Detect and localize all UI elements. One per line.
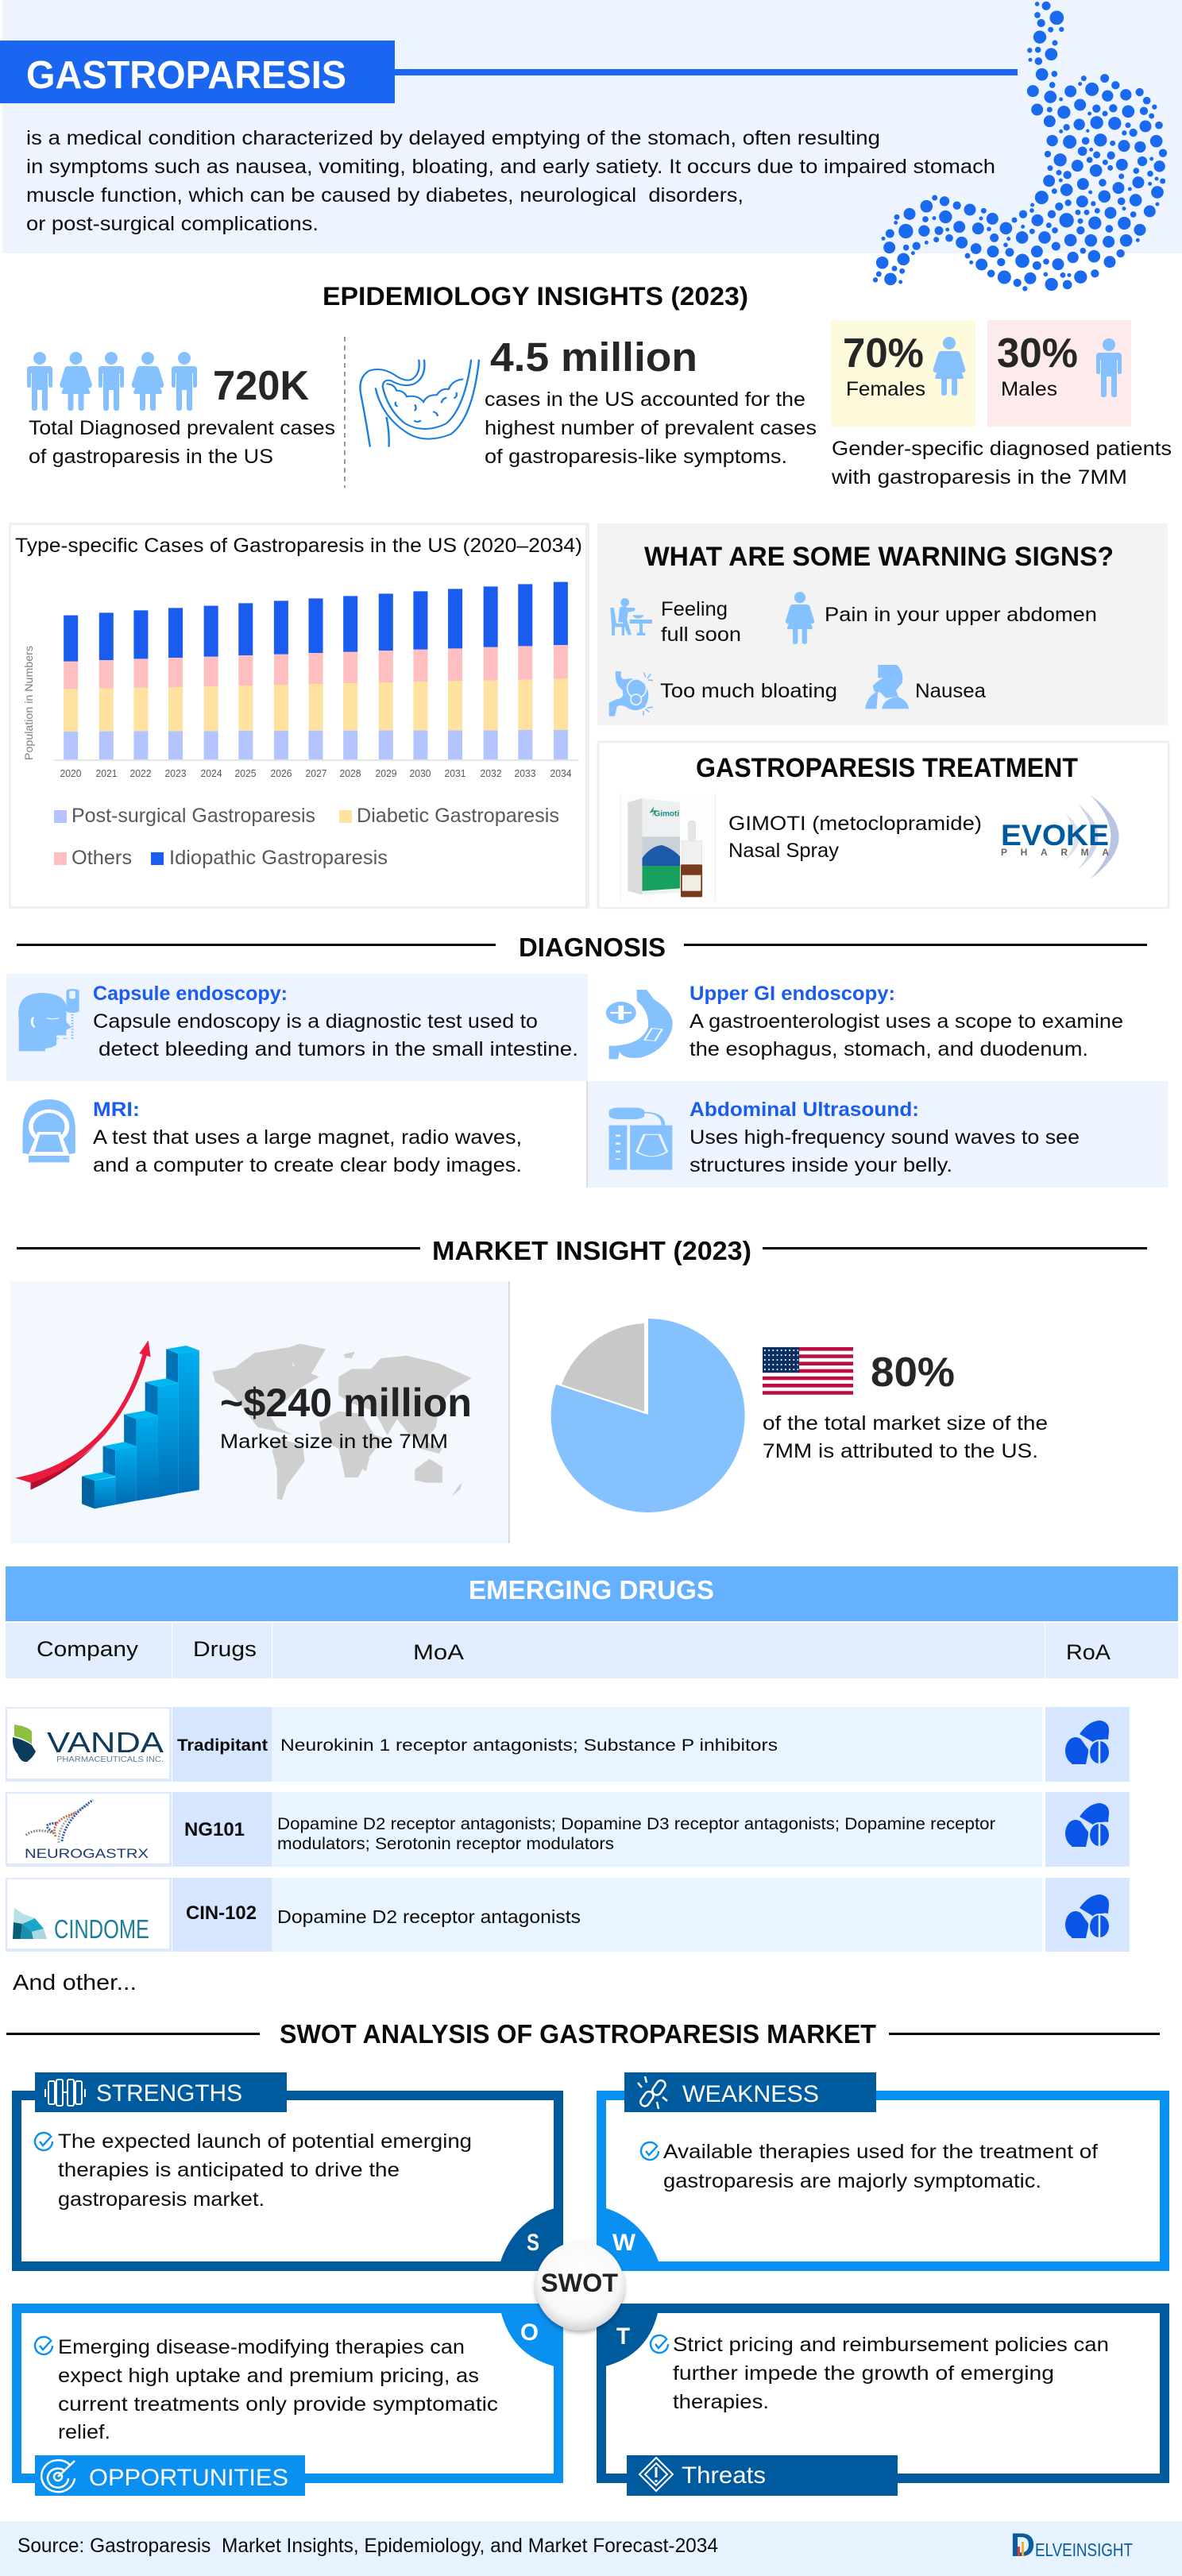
logo: Vanda: [13, 1724, 164, 1764]
pie chart: US share: [551, 1319, 745, 1512]
panel: opportunities: O: [520, 2319, 539, 2346]
panel: capsule endoscopy: detect bleeding and tumors in the small intestine.: [98, 1038, 578, 1060]
chart legend: Others: [71, 847, 132, 869]
icon: pills: [1065, 1721, 1110, 1764]
caption: gender split: [831, 438, 1172, 489]
panel: weakness: Available therapies used for the treatment of: [663, 2141, 1098, 2163]
panel: market size: ~$240 million: [220, 1381, 472, 1425]
chart title: Type-specific Cases of Gastroparesis in the US (2020–2034): [15, 535, 582, 557]
panel: upper GI endoscopy: Upper GI endoscopy:: [690, 983, 895, 1005]
row: Neurogastrx / NG101: [6, 1792, 1130, 1867]
row: Vanda / Tradipitant: [6, 1707, 1130, 1782]
treatment name: GIMOTI (metoclopramide): [728, 813, 982, 835]
x axis years: 2032: [480, 768, 502, 779]
row: Vanda / Tradipitant: Neurokinin 1 receptor antagonists; Substance P inhibitors: [280, 1736, 778, 1755]
warning: feeling full soon: full soon: [661, 624, 741, 646]
x axis years: 2030: [410, 768, 431, 779]
panel: weakness: [597, 2072, 1165, 2271]
panel: market size: [10, 1281, 509, 1543]
row: Cindome / CIN-102: CIN-102: [186, 1902, 257, 1924]
icon: MRI scanner: [22, 1099, 75, 1162]
intro text block: muscle function, which can be caused by diabetes, neurological disorders,: [26, 184, 744, 207]
panel: upper GI endoscopy: [606, 983, 1123, 1060]
panel: males share: 30%: [997, 330, 1078, 377]
x axis years: [60, 768, 572, 779]
world map: [212, 1344, 472, 1500]
chart legend: Diabetic Gastroparesis: [357, 805, 559, 827]
x axis years: 2024: [200, 768, 222, 779]
panel: males share: Males: [1001, 378, 1057, 400]
icon: dotted stomach: [873, 2, 1167, 291]
x axis years: 2034: [550, 768, 572, 779]
logo: Vanda: PHARMACEUTICALS INC.: [56, 1755, 164, 1764]
icon: US flag: [763, 1347, 853, 1395]
strengths header: STRENGTHS: [96, 2080, 242, 2107]
row: Neurogastrx / NG101: NG101: [184, 1819, 245, 1840]
panel: strengths: The expected launch of potential emerging: [58, 2130, 472, 2153]
x axis years: 2026: [270, 768, 292, 779]
stat: 720K diagnosed cases: of gastroparesis in the US: [29, 446, 273, 468]
panel: capsule endoscopy: [6, 974, 588, 1081]
treatment name: [728, 813, 982, 862]
stat: 720K diagnosed cases: [27, 352, 335, 468]
icon: woman: [933, 337, 965, 396]
stat: 80 percent: [763, 1350, 1048, 1462]
x axis years: 2022: [130, 768, 152, 779]
caption: gender split: with gastroparesis in the 7MM: [831, 466, 1127, 489]
panel: opportunities: Emerging disease-modifying therapies can: [58, 2336, 465, 2358]
panel: males share: [987, 320, 1131, 427]
x axis years: 2025: [235, 768, 257, 779]
table column headers: Company: [37, 1637, 139, 1661]
panel: weakness: gastroparesis are majorly symptomatic.: [663, 2170, 1041, 2192]
caption: gender split: Gender-specific diagnosed patients: [832, 438, 1172, 460]
panel: treatment: [598, 742, 1168, 908]
panel: threats: Strict pricing and reimbursement policies can: [673, 2334, 1109, 2356]
x axis years: 2027: [305, 768, 327, 779]
panel: threats: further impede the growth of emerging: [673, 2362, 1054, 2385]
section heading: diagnosis: [17, 933, 1147, 962]
logo: Cindome: CINDOME: [54, 1914, 149, 1944]
panel: females share: Females: [846, 378, 925, 400]
intro text block: in symptoms such as nausea, vomiting, bloating, and early satiety. It occurs due to impaired stomach: [26, 156, 995, 178]
stat: 4.5 million cases: highest number of prevalent cases: [485, 417, 817, 439]
stat: 80 percent: 80%: [871, 1350, 955, 1396]
x axis years: 2029: [375, 768, 397, 779]
panel: strengths: therapies is anticipated to drive the: [58, 2159, 400, 2181]
icon: bloated stomach: [609, 671, 653, 716]
panel: market size: Market size in the 7MM: [220, 1431, 448, 1453]
logo: DelveInsight: [1010, 2526, 1133, 2563]
icon: row of people: [27, 352, 197, 411]
icon: person eating: [610, 598, 652, 635]
x axis years: 2028: [340, 768, 361, 779]
stat: 720K diagnosed cases: 720K: [213, 363, 309, 409]
icon: head with capsule: [18, 989, 79, 1051]
x axis years: 2031: [445, 768, 466, 779]
row: Cindome / CIN-102: Dopamine D2 receptor antagonists: [277, 1906, 581, 1927]
warning: nausea: Nausea: [915, 680, 986, 702]
panel: opportunities: current treatments only provide symptomatic: [58, 2393, 498, 2416]
panel: threats: therapies.: [673, 2391, 769, 2413]
panel: females share: 70%: [843, 330, 924, 377]
panel: opportunities: relief.: [58, 2421, 110, 2443]
panel: opportunities: expect high uptake and premium pricing, as: [58, 2365, 479, 2387]
warning: feeling full soon: Feeling: [661, 598, 728, 620]
weakness header: WEAKNESS: [682, 2081, 819, 2107]
table column headers: MoA: [413, 1640, 464, 1664]
panel: strengths: S: [527, 2230, 539, 2256]
logo: Evoke Pharma: [1001, 795, 1119, 879]
stat: 4.5 million cases: [485, 334, 817, 468]
logo: DelveInsight: D: [1010, 2526, 1035, 2563]
icon: ultrasound machine: [609, 1107, 672, 1170]
panel: threats: T: [616, 2323, 630, 2350]
panel: MRI: MRI:: [93, 1099, 140, 1121]
panel: threats: [597, 2304, 1165, 2496]
product image: Gimoti box and spray: [620, 794, 715, 902]
panel: upper GI endoscopy: the esophagus, stomach, and duodenum.: [690, 1038, 1088, 1060]
panel: MRI: [22, 1099, 522, 1176]
note: and others: And other...: [13, 1970, 137, 1995]
panel: MRI: A test that uses a large magnet, radio waves,: [93, 1126, 522, 1149]
x axis years: 2021: [95, 768, 118, 779]
panel: capsule endoscopy: Capsule endoscopy is a diagnostic test used to: [93, 1010, 538, 1033]
y axis label: Population in Numbers: [22, 646, 35, 760]
icon: pills: [1065, 1803, 1110, 1847]
logo: Neurogastrx: [25, 1800, 149, 1861]
panel: strengths: gastroparesis market.: [58, 2188, 265, 2211]
x axis years: 2023: [165, 768, 187, 779]
panel: abdominal ultrasound: Abdominal Ultrasound:: [690, 1099, 919, 1121]
stat: 720K diagnosed cases: Total Diagnosed prevalent cases: [29, 417, 335, 439]
table title bar: EMERGING DRUGS: [469, 1575, 714, 1605]
logo: Neurogastrx: NEUROGASTRX: [25, 1846, 149, 1861]
icon: stomach outline: [360, 360, 479, 447]
threats header: [627, 2455, 898, 2496]
icon: pills: [1065, 1894, 1110, 1938]
product image: Gimoti box and spray: Gimoti: [654, 809, 679, 818]
panel: capsule endoscopy: Capsule endoscopy:: [93, 983, 288, 1005]
panel: upper GI endoscopy: A gastroenterologist uses a scope to examine: [690, 1010, 1123, 1033]
warning heading: WHAT ARE SOME WARNING SIGNS?: [644, 542, 1114, 572]
stat: 80 percent: 7MM is attributed to the US.: [763, 1440, 1038, 1462]
panel: females share: [831, 320, 975, 427]
panel: type-specific cases chart: [10, 524, 588, 907]
icon: broken chain: [638, 2076, 667, 2109]
heading: epidemiology insights: EPIDEMIOLOGY INSIGHTS (2023): [323, 282, 748, 311]
treatment heading: GASTROPARESIS TREATMENT: [696, 753, 1078, 783]
logo: Evoke Pharma: PHARMA: [1001, 847, 1109, 858]
x axis years: 2033: [515, 768, 536, 779]
icon: warning diamond: [639, 2458, 673, 2491]
panel: abdominal ultrasound: structures inside your belly.: [690, 1154, 952, 1176]
section heading: SWOT analysis: [6, 2019, 1160, 2049]
row: Vanda / Tradipitant: Tradipitant: [177, 1736, 268, 1755]
row: Neurogastrx / NG101: Dopamine D2 receptor antagonists; Dopamine D3 receptor antagonists; Dopamine receptor: [277, 1815, 995, 1833]
weakness header: [624, 2072, 876, 2112]
section heading: diagnosis: DIAGNOSIS: [519, 933, 666, 962]
warning: feeling full soon: [661, 598, 741, 646]
SWOT center badge: [535, 2242, 624, 2331]
panel: abdominal ultrasound: [587, 1081, 1168, 1188]
panel: header band: [2, 0, 1182, 253]
stat: 80 percent: of the total market size of the: [763, 1412, 1048, 1435]
row: Cindome / CIN-102: [6, 1878, 1130, 1952]
panel: emerging drugs table: [6, 1566, 1178, 1995]
section heading: market insight: MARKET INSIGHT (2023): [432, 1236, 751, 1265]
title bar with heading: GASTROPARESIS: [26, 54, 346, 97]
title bar with heading: [0, 41, 395, 103]
threats header: Threats: [682, 2462, 766, 2489]
logo: Cindome: [13, 1908, 149, 1944]
panel: MRI: and a computer to create clear body images.: [93, 1154, 522, 1176]
table column headers: [6, 1623, 1178, 1678]
treatment name: Nasal Spray: [728, 840, 840, 862]
panel: abdominal ultrasound: Uses high-frequency sound waves to see: [690, 1126, 1080, 1149]
intro text block: [26, 127, 995, 235]
stat: 4.5 million cases: of gastroparesis-like symptoms.: [485, 446, 787, 468]
chart legend: Post-surgical Gastroparesis: [71, 805, 315, 827]
icon: nausea face: [865, 665, 909, 709]
icon: rising bar graphic with arrow: [15, 1340, 199, 1508]
panel: weakness: W: [612, 2230, 636, 2256]
chart legend: [54, 805, 559, 869]
warning: upper abdomen pain: Pain in your upper abdomen: [825, 604, 1097, 626]
icon: stomach with medical cross: [606, 990, 673, 1059]
logo: Evoke Pharma: EVOKE: [1001, 819, 1109, 852]
icon: woman: [786, 592, 814, 644]
stat: 4.5 million cases: 4.5 million: [490, 334, 697, 380]
icon: man: [1096, 338, 1122, 397]
opportunities header: [35, 2455, 305, 2496]
logo: Vanda: VANDA: [47, 1726, 164, 1759]
chart legend: Idiopathic Gastroparesis: [169, 847, 388, 869]
icon: target: [41, 2460, 75, 2492]
table column headers: Drugs: [193, 1637, 257, 1661]
icon: dumbbell: [45, 2080, 85, 2106]
panel: warning signs: [597, 523, 1168, 725]
title connector line: [395, 69, 1018, 75]
logo: DelveInsight: ELVEINSIGHT: [1035, 2539, 1133, 2560]
intro text block: or post-surgical complications.: [26, 213, 319, 235]
section heading: SWOT analysis: SWOT ANALYSIS OF GASTROPARESIS MARKET: [280, 2019, 876, 2049]
SWOT center badge: SWOT: [541, 2269, 618, 2297]
table column headers: RoA: [1066, 1640, 1111, 1664]
table title bar: [6, 1566, 1178, 1621]
stat: 4.5 million cases: cases in the US accounted for the: [485, 388, 805, 411]
section heading: market insight: [17, 1236, 1147, 1265]
opportunities header: OPPORTUNITIES: [89, 2465, 288, 2491]
x axis years: 2020: [60, 768, 82, 779]
stacked bar chart: [54, 582, 579, 761]
strengths header: [35, 2072, 287, 2112]
footer: source: [0, 2521, 1182, 2576]
panel: strengths: [17, 2072, 563, 2271]
warning: bloating: Too much bloating: [660, 680, 837, 702]
intro text block: is a medical condition characterized by delayed emptying of the stomach, often resulting: [26, 127, 880, 149]
footer: source: Source: Gastroparesis Market Insights, Epidemiology, and Market Forecast-2034: [17, 2535, 718, 2557]
panel: opportunities: [17, 2304, 563, 2496]
row: Neurogastrx / NG101: modulators; Serotonin receptor modulators: [277, 1835, 614, 1853]
